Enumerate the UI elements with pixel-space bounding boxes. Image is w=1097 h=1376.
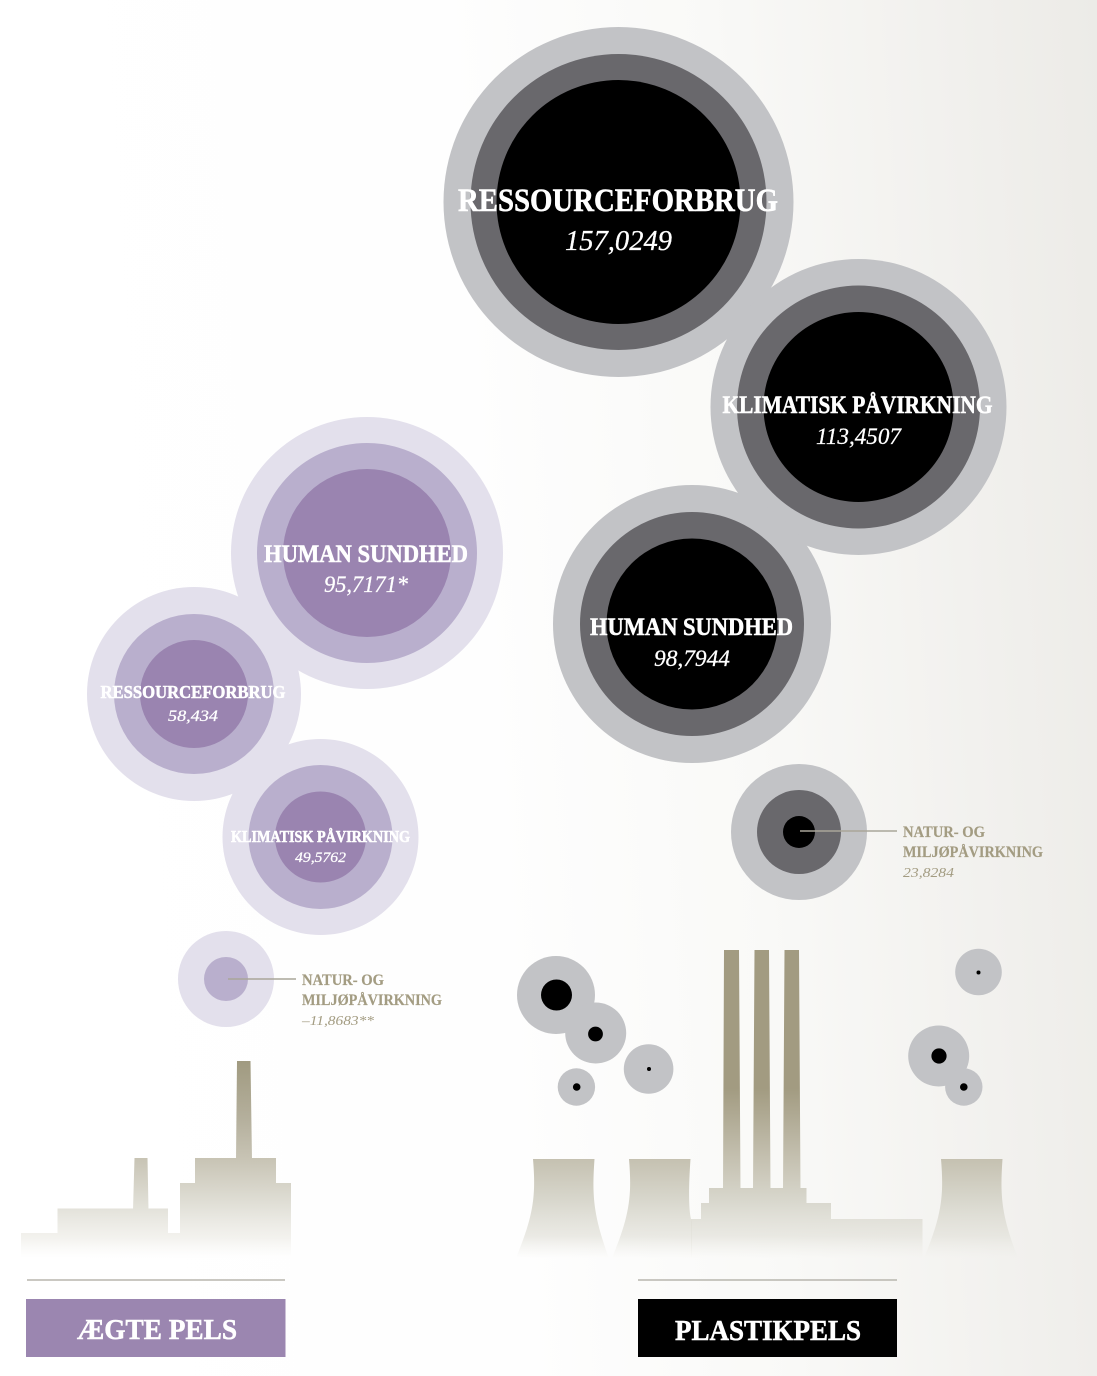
callout: plastic nature and environment: MILJØPÅVIRKNING — [903, 844, 1043, 861]
stepped building — [691, 1188, 922, 1258]
bubble: fur resource use — [87, 587, 301, 801]
value: climate impact: 113,4507 — [816, 424, 903, 449]
bubble: plastic climate impact — [710, 259, 1006, 555]
bubble: fur nature and environment — [178, 931, 296, 1027]
value: climate impact: 49,5762 — [295, 850, 347, 866]
short chimney — [133, 1158, 148, 1210]
callout: plastic nature and environment: 23,8284 — [903, 866, 954, 881]
label: climate impact: KLIMATISK PÅVIRKNING — [231, 827, 410, 846]
divider: fur — [27, 1279, 285, 1281]
bubble: plastic human health — [553, 485, 831, 763]
smoke puffs: left of plastic factory — [517, 956, 673, 1106]
cooling tower 1 — [516, 1159, 609, 1258]
label: resource use: RESSOURCEFORBRUG — [458, 183, 778, 219]
callout: fur nature and environment — [301, 972, 442, 1029]
stepped building — [21, 1158, 291, 1258]
label: resource use: RESSOURCEFORBRUG — [100, 682, 286, 702]
category label: real fur: ÆGTE PELS — [77, 1314, 237, 1346]
category label: plastic fur — [638, 1299, 897, 1357]
value: human health: 98,7944 — [654, 646, 730, 671]
callout: plastic nature and environment: NATUR- OG — [903, 824, 985, 841]
value: resource use: 157,0249 — [565, 225, 672, 257]
bubble: fur human health — [231, 417, 503, 689]
label: human health: HUMAN SUNDHED — [264, 541, 468, 568]
label: climate impact: KLIMATISK PÅVIRKNING — [722, 391, 992, 419]
bubble: plastic nature and environment — [731, 764, 897, 900]
cooling tower 3 — [924, 1159, 1018, 1258]
leader line — [800, 830, 897, 832]
cooling tower 2 — [612, 1159, 692, 1258]
fur factory silhouette — [21, 1061, 291, 1258]
smoke puffs: right of plastic factory — [908, 949, 1002, 1106]
value: human health: 95,7171* — [324, 572, 408, 597]
category label: real fur — [26, 1299, 286, 1357]
callout: fur nature and environment: –11,8683** — [301, 1014, 374, 1029]
divider: plastic — [638, 1279, 897, 1281]
plastic factory silhouette — [516, 950, 1018, 1258]
callout: fur nature and environment: NATUR- OG — [302, 972, 384, 989]
callout: plastic nature and environment — [903, 824, 1043, 881]
bubble: fur climate impact — [222, 739, 418, 935]
callout: fur nature and environment: MILJØPÅVIRKNING — [302, 992, 442, 1009]
label: human health: HUMAN SUNDHED — [590, 614, 793, 641]
leader line — [228, 978, 296, 980]
tall chimney — [236, 1061, 252, 1160]
category label: plastic fur: PLASTIKPELS — [675, 1315, 861, 1347]
value: resource use: 58,434 — [168, 708, 218, 725]
bubble: plastic resource use — [444, 27, 794, 377]
chimneys — [723, 950, 800, 1190]
